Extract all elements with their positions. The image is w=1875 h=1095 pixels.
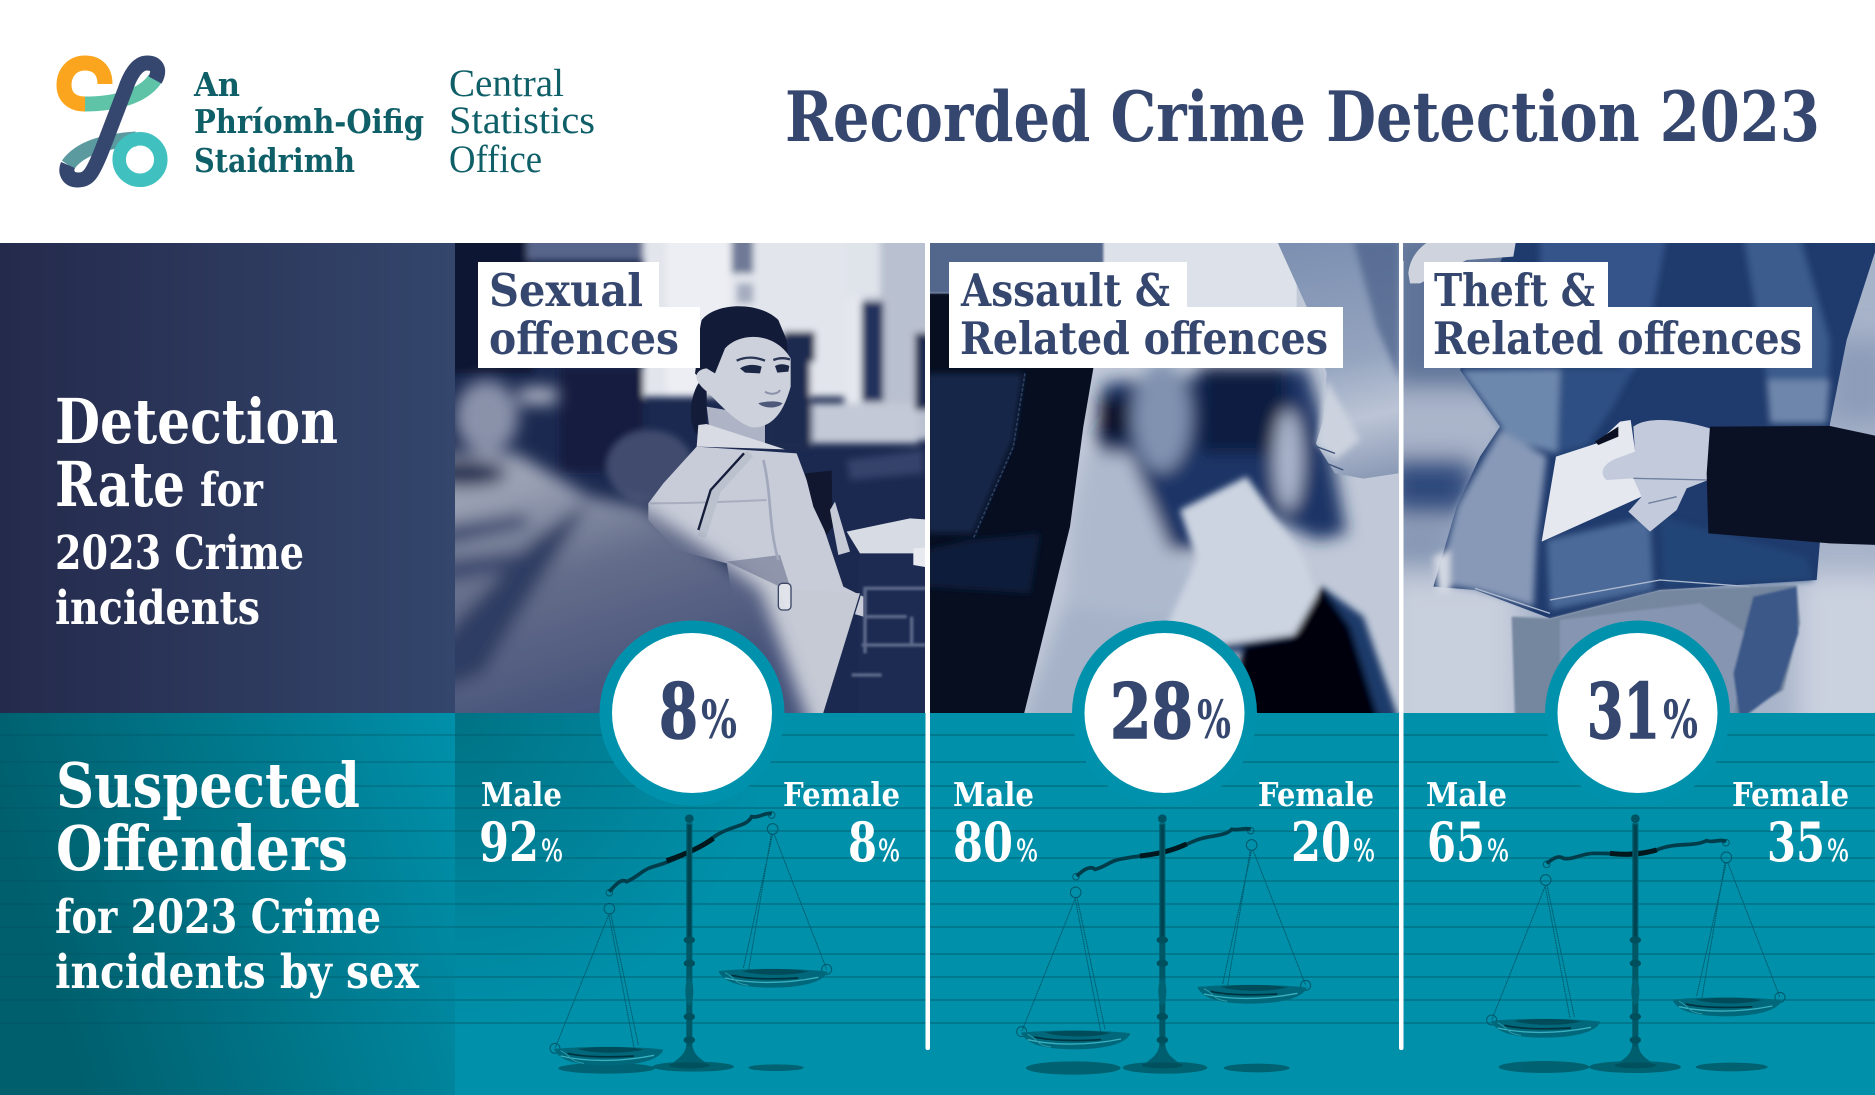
logo mark	[64, 63, 161, 180]
jeans	[927, 293, 1103, 717]
photo: woman looking over shoulder	[455, 243, 925, 713]
stat: sexual offences male: Male	[481, 775, 562, 814]
stat: assault male: 80	[953, 810, 1013, 874]
logo text: English name	[449, 62, 595, 181]
stat: theft female: Female	[1732, 775, 1849, 814]
stat: theft female: 35	[1767, 810, 1825, 874]
stat: theft male: %	[1487, 834, 1509, 869]
stat: sexual offences male: %	[541, 834, 563, 869]
heading: theft and related offences	[1424, 262, 1812, 368]
icon: scales 1	[550, 812, 832, 1074]
stat: assault male: %	[1016, 834, 1038, 869]
divider 2	[1399, 260, 1404, 1050]
callout: detection rate 31%: %	[1663, 690, 1698, 751]
panel: detection rate label: Detection	[55, 385, 338, 458]
logo text: English name: Statistics	[449, 99, 595, 142]
stat: assault male	[953, 775, 1038, 874]
stat: sexual offences female	[783, 775, 900, 874]
logo text: English name: Central	[449, 62, 564, 105]
heading: theft and related offences: Theft &	[1434, 264, 1595, 317]
dark sleeve	[1707, 426, 1875, 545]
panel: detection rate label: 2023 Crime	[55, 526, 304, 581]
stat: assault male: Male	[953, 775, 1034, 814]
panel: suspected offenders label: for 2023 Crime	[55, 890, 381, 945]
stat: theft male: 65	[1427, 810, 1485, 874]
stat: theft male: Male	[1426, 775, 1507, 814]
stat: sexual offences male	[479, 775, 563, 874]
blurred foreground person	[455, 370, 818, 713]
callout: detection rate 31%: 31	[1587, 667, 1660, 756]
heading: sexual offences	[478, 262, 700, 368]
stat: theft female: %	[1827, 834, 1849, 869]
stat: theft female	[1732, 775, 1849, 874]
panel: detection rate label: Rate	[55, 448, 185, 521]
panel: detection rate label: incidents	[55, 581, 260, 636]
photo: pickpocket	[1403, 243, 1875, 713]
stat: assault female	[1258, 775, 1375, 874]
callout: detection rate 8%: 8	[659, 667, 698, 756]
stat: assault female: %	[1353, 834, 1375, 869]
heading: assault and related offences	[949, 262, 1343, 368]
panel: suspected offenders label	[55, 749, 420, 1000]
panel: suspected offenders label: Offenders	[56, 812, 348, 885]
icon: scales 2	[1017, 814, 1311, 1075]
icon: scales 3	[1487, 814, 1785, 1073]
jacket	[1433, 237, 1875, 618]
logo text: Irish name: An	[193, 65, 240, 104]
heading: assault and related offences: Related offences	[960, 312, 1328, 365]
panel: detection rate label: for	[200, 463, 264, 518]
logo text: Irish name: Phríomh-Oifig	[194, 102, 424, 141]
divider 1	[926, 260, 930, 1050]
jeans	[1512, 585, 1800, 720]
photo: raised fist	[927, 237, 1405, 740]
logo text: Irish name: Staidrimh	[194, 141, 355, 180]
panel: teal lower band	[0, 713, 1875, 1095]
arm and fist	[1275, 237, 1400, 479]
stat: sexual offences female: %	[878, 834, 900, 869]
stat: assault female: Female	[1258, 775, 1374, 814]
callout: detection rate 8%: %	[701, 690, 737, 751]
logo text: Irish name	[193, 65, 424, 180]
callout: detection rate 28%: %	[1197, 690, 1231, 751]
heading: sexual offences: offences	[489, 312, 679, 365]
panel: suspected offenders label: incidents by sex	[55, 945, 420, 1000]
stat: sexual offences female: Female	[783, 775, 900, 814]
stat: sexual offences female: 8	[848, 810, 877, 874]
heading: assault and related offences: Assault &	[960, 264, 1170, 317]
heading: sexual offences: Sexual	[489, 264, 643, 317]
stat: assault female: 20	[1291, 810, 1351, 874]
panel: detection rate label	[0, 243, 455, 713]
callout: detection rate 28%	[1072, 620, 1257, 806]
stat: theft male	[1426, 775, 1509, 874]
heading: theft and related offences: Related offences	[1433, 312, 1802, 365]
panel: suspected offenders label: Suspected	[56, 749, 360, 822]
callout: detection rate 28%: 28	[1110, 667, 1193, 756]
callout: detection rate 31%	[1545, 620, 1730, 806]
stat: sexual offences male: 92	[479, 810, 539, 874]
phone	[1542, 420, 1642, 542]
hand	[1603, 420, 1710, 532]
logo text: English name: Office	[449, 138, 542, 181]
callout: detection rate 8%	[600, 620, 784, 806]
woman figure	[648, 306, 863, 715]
